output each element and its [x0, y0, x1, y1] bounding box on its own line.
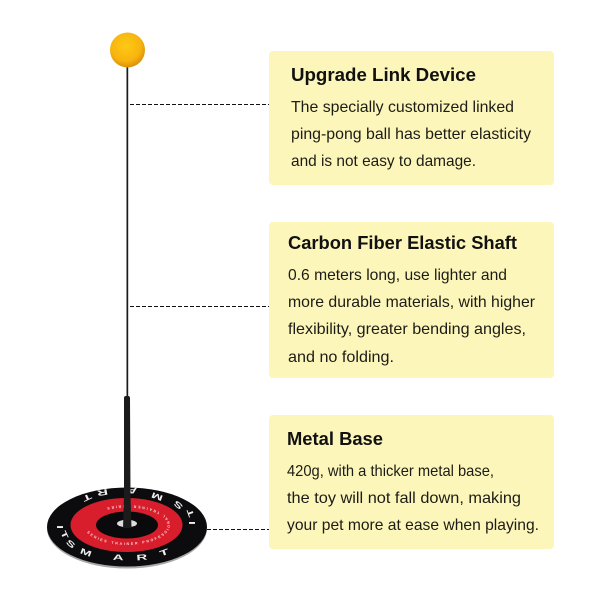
icon: ping-pong ball: [110, 32, 145, 68]
leader line: base: [207, 528, 269, 530]
shaft: [123, 60, 132, 528]
heading: metal base: Metal Base: [287, 428, 383, 449]
text: metal base description: [287, 463, 539, 534]
inner ring text: SERIES TRAINER PROFESSIONAL TRAINER SERIES: [87, 505, 170, 545]
text: metal base description: the toy will not fall down, making: [287, 490, 521, 507]
heading: upgrade link device: Upgrade Link Device: [291, 64, 476, 85]
text: upgrade link device description: and is not easy to damage.: [291, 153, 476, 170]
text: upgrade link device description: The specially customized linked: [291, 99, 514, 116]
panel: metal base: [269, 415, 554, 549]
outer ring text: S: [172, 498, 185, 511]
outer ring text: I: [55, 525, 64, 529]
outer ring text: T: [58, 530, 70, 541]
outer ring text: T: [185, 507, 196, 518]
text: carbon fiber description: 0.6 meters long, use lighter and: [288, 267, 507, 284]
outer ring text: I: [188, 521, 197, 525]
metal base disc: [47, 486, 207, 568]
outer ring text: T: [158, 546, 171, 558]
outer ring text: R: [136, 552, 148, 562]
leader line: shaft: [130, 306, 269, 308]
text: upgrade link device description: ping-pong ball has better elasticity: [291, 126, 531, 143]
panel: upgrade link device: [269, 51, 554, 185]
outer ring text: R: [96, 487, 109, 498]
text: metal base description: 420g, with a thicker metal base,: [287, 463, 494, 480]
leader line: ball: [130, 104, 269, 106]
heading: carbon fiber elastic shaft: Carbon Fiber Elastic Shaft: [288, 232, 517, 253]
text: carbon fiber description: flexibility, greater bending angles,: [288, 321, 526, 338]
text: metal base description: your pet more at ease when playing.: [287, 517, 539, 534]
red ring: [70, 498, 182, 552]
text: upgrade link device description: [291, 99, 531, 170]
outer ring text: A: [126, 486, 138, 496]
text: carbon fiber description: [288, 267, 536, 366]
text: carbon fiber description: more durable materials, with higher: [288, 294, 536, 311]
text: carbon fiber description: and no folding.: [288, 349, 394, 366]
outer ring text: [55, 486, 197, 562]
outer ring text: A: [112, 552, 124, 562]
outer ring text: S: [64, 538, 77, 551]
panel: carbon fiber elastic shaft: [269, 222, 554, 378]
outer ring text: T: [80, 491, 93, 504]
outer ring text: M: [79, 547, 93, 559]
outer ring text: M: [150, 490, 164, 502]
